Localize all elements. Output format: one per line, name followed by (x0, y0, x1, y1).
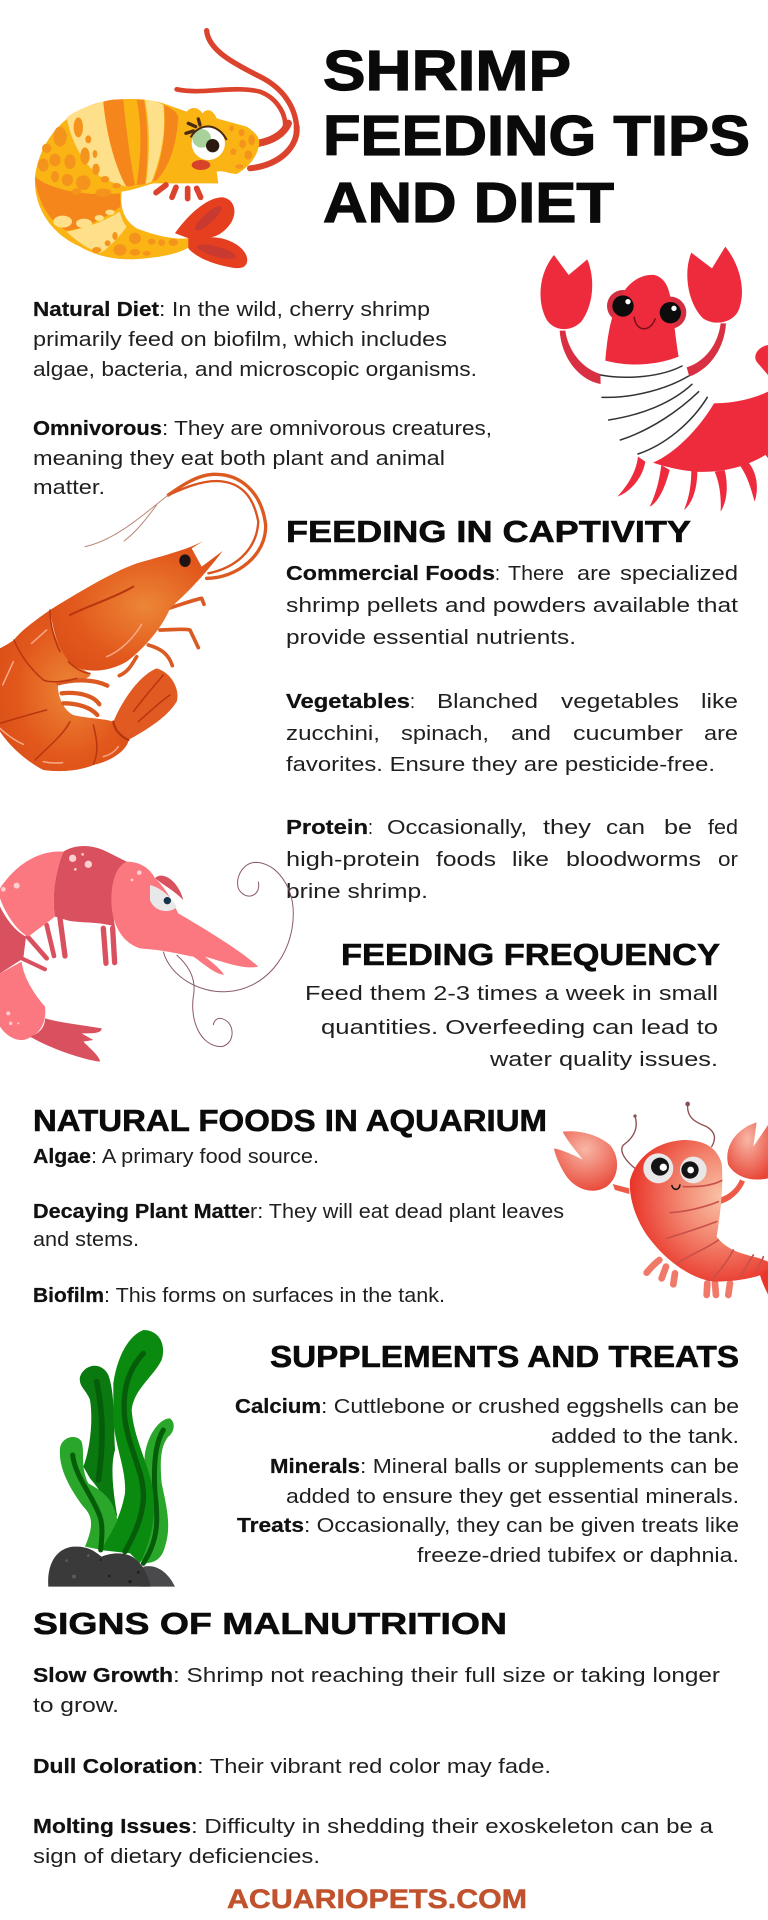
text block: omnivorous: Omnivorous (33, 417, 162, 440)
text block: supplements: added to the tank. (551, 1425, 739, 1448)
text block: commercial foods: There (508, 562, 564, 585)
text block: protein: Occasionally, (387, 816, 527, 839)
heading: signs of malnutrition: SIGNS OF MALNUTRITION (33, 1606, 507, 1641)
text block: feeding frequency: water quality issues. (489, 1048, 718, 1071)
text block: feeding frequency: Feed them 2-3 times a week in small (305, 982, 718, 1005)
text block: signs of malnutrition: : Their vibrant red color may fade. (197, 1755, 551, 1778)
text block: signs of malnutrition: : Difficulty in shedding their exoskeleton can be a (191, 1815, 714, 1838)
text block: commercial foods: shrimp pellets and powders available that (286, 594, 738, 617)
illustration: green seaweed on rock (48, 1330, 175, 1587)
text block: signs of malnutrition (33, 1664, 720, 1868)
text block: protein: be (664, 816, 692, 839)
text block: natural foods: r: They will eat dead plant leaves (250, 1200, 564, 1223)
illustration: red cartoon lobster (541, 247, 768, 512)
text block: commercial foods: : (495, 562, 500, 585)
text block: supplements: : Mineral balls or supplements can be (360, 1455, 739, 1478)
text block: supplements: Minerals (270, 1455, 360, 1478)
text block: supplements: freeze-dried tubifex or daphnia. (417, 1544, 739, 1567)
text block: protein: bloodworms (566, 848, 701, 871)
text block: vegetables: Blanched (437, 690, 538, 713)
text block: natural foods: : This forms on surfaces in the tank. (104, 1284, 445, 1307)
text block: natural foods: Biofilm (33, 1284, 104, 1307)
text block: natural diet: primarily feed on biofilm, which includes (33, 328, 447, 351)
text block: natural diet: : In the wild, cherry shrimp (159, 298, 430, 321)
text block: supplements: Treats (237, 1514, 304, 1537)
illustration: pink shrimp (0, 846, 293, 1062)
text block: protein (286, 816, 738, 903)
text block: protein: like (512, 848, 549, 871)
heading: feeding in captivity: FEEDING IN CAPTIVITY (286, 514, 691, 549)
text block: protein: they (543, 816, 592, 839)
text block: protein: fed (708, 816, 738, 839)
heading: feeding frequency: FEEDING FREQUENCY (341, 937, 720, 972)
text block: protein: high-protein (286, 848, 420, 871)
text block: supplements: Calcium (235, 1395, 321, 1418)
heading: natural foods in aquarium: NATURAL FOODS IN AQUARIUM (33, 1103, 547, 1138)
text block: omnivorous (33, 417, 492, 499)
text block: signs of malnutrition: Dull Coloration (33, 1755, 197, 1778)
text block: commercial foods: are (577, 562, 611, 585)
text block: protein: Protein (286, 816, 368, 839)
text block: commercial foods: specialized (620, 562, 738, 585)
text block: signs of malnutrition: : Shrimp not reaching their full size or taking longer (173, 1664, 720, 1687)
text block: natural foods (33, 1145, 564, 1307)
text block: omnivorous: : They are omnivorous creatures, (162, 417, 492, 440)
text block: omnivorous: matter. (33, 476, 105, 499)
text block: natural foods: Decaying Plant Matte (33, 1200, 250, 1223)
text block: signs of malnutrition: Slow Growth (33, 1664, 173, 1687)
text block: natural diet: algae, bacteria, and microscopic organisms. (33, 358, 477, 381)
text block: natural foods: : A primary food source. (91, 1145, 319, 1168)
text block: protein: or (718, 848, 738, 871)
text block: vegetables: cucumber (573, 722, 683, 745)
text block: natural diet: Natural Diet (33, 298, 159, 321)
text block: commercial foods (286, 562, 738, 649)
text block: feeding frequency (305, 982, 718, 1071)
text block: feeding frequency: quantities. Overfeeding can lead to (321, 1016, 718, 1039)
text block: natural foods: Algae (33, 1145, 91, 1168)
title: AND DIET (323, 171, 614, 235)
text block: protein: foods (436, 848, 496, 871)
text block: vegetables: are (704, 722, 738, 745)
title: SHRIMP (323, 39, 571, 103)
illustration: watercolor red shrimp with claws (554, 1102, 768, 1295)
text block: vegetables: and (511, 722, 551, 745)
text block: vegetables: like (701, 690, 738, 713)
text block: protein: : (368, 816, 373, 839)
title: FEEDING TIPS (323, 104, 750, 168)
text block: commercial foods: Commercial Foods (286, 562, 495, 585)
text block: supplements: added to ensure they get essential minerals. (286, 1485, 739, 1508)
text block: commercial foods: provide essential nutrients. (286, 626, 576, 649)
text block: omnivorous: meaning they eat both plant and animal (33, 447, 445, 470)
illustration: orange cartoon shrimp (35, 31, 297, 268)
text block: vegetables (286, 690, 738, 776)
illustration: realistic orange shrimp (0, 474, 266, 771)
text block: vegetables: spinach, (401, 722, 489, 745)
text block: supplements: : Occasionally, they can be given treats like (304, 1514, 739, 1537)
text block: protein: brine shrimp. (286, 880, 428, 903)
text block: vegetables: zucchini, (286, 722, 380, 745)
text block: vegetables: Vegetables (286, 690, 410, 713)
text block: signs of malnutrition: Molting Issues (33, 1815, 191, 1838)
heading: supplements and treats: SUPPLEMENTS AND TREATS (270, 1339, 739, 1374)
title (323, 39, 750, 235)
text block: natural foods: and stems. (33, 1228, 139, 1251)
text block: signs of malnutrition: sign of dietary deficiencies. (33, 1845, 320, 1868)
text block: supplements (235, 1395, 739, 1567)
text block: supplements: : Cuttlebone or crushed eggshells can be (321, 1395, 739, 1418)
text block: signs of malnutrition: to grow. (33, 1694, 119, 1717)
text block: vegetables: vegetables (561, 690, 679, 713)
text block: protein: can (606, 816, 645, 839)
text block: natural diet (33, 298, 477, 381)
text block: vegetables: favorites. Ensure they are pesticide-free. (286, 753, 715, 776)
text block: vegetables: : (410, 690, 415, 713)
footer website: ACUARIOPETS.COM (227, 1884, 527, 1914)
